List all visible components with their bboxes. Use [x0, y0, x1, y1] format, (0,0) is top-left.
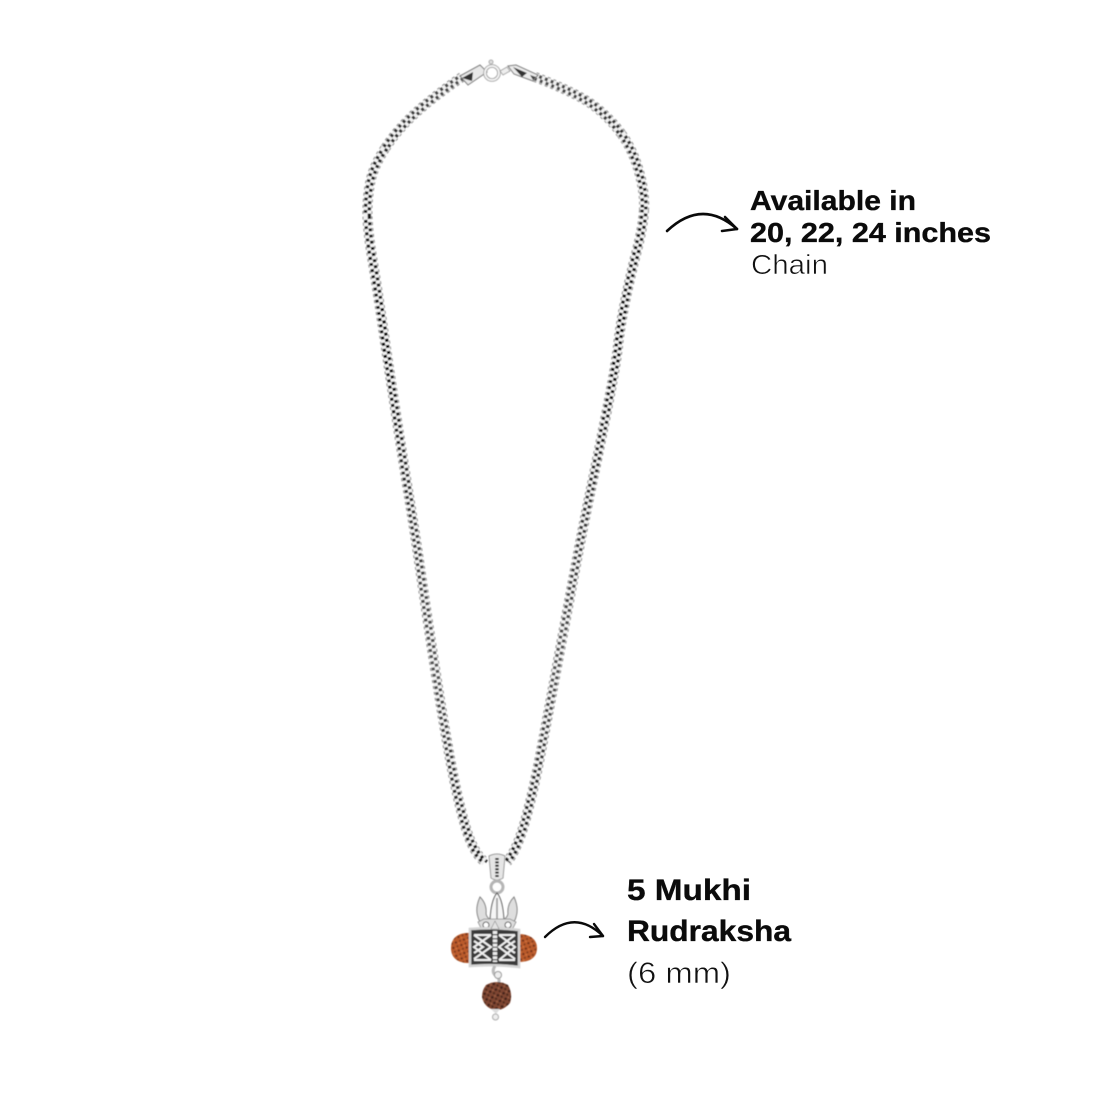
- bead: lower rudraksha: [482, 966, 511, 1020]
- bead: left rudraksha: [451, 933, 472, 963]
- text: rudraksha details: (6 mm): [627, 957, 731, 990]
- text: rudraksha details: 5 Mukhi: [627, 874, 751, 907]
- arrow: chain callout: [667, 214, 737, 231]
- text: rudraksha details: Rudraksha: [627, 915, 791, 948]
- text: chain lengths: Available in: [750, 185, 916, 216]
- text: chain lengths: 20, 22, 24 inches: [750, 217, 991, 248]
- callout: chain lengths: [667, 185, 991, 280]
- text: chain lengths: Chain: [751, 249, 828, 280]
- clasp: [460, 60, 538, 85]
- text: chain lengths: [750, 185, 991, 280]
- callout: rudraksha: [545, 874, 791, 990]
- arrow: rudraksha callout: [545, 922, 603, 937]
- damru drum: [470, 921, 519, 967]
- text: rudraksha details: [627, 874, 791, 990]
- bail: [489, 854, 505, 893]
- trishul: [477, 893, 517, 930]
- necklace chain: [366, 75, 646, 862]
- bead: right rudraksha: [518, 934, 537, 962]
- pendant: [451, 854, 537, 1020]
